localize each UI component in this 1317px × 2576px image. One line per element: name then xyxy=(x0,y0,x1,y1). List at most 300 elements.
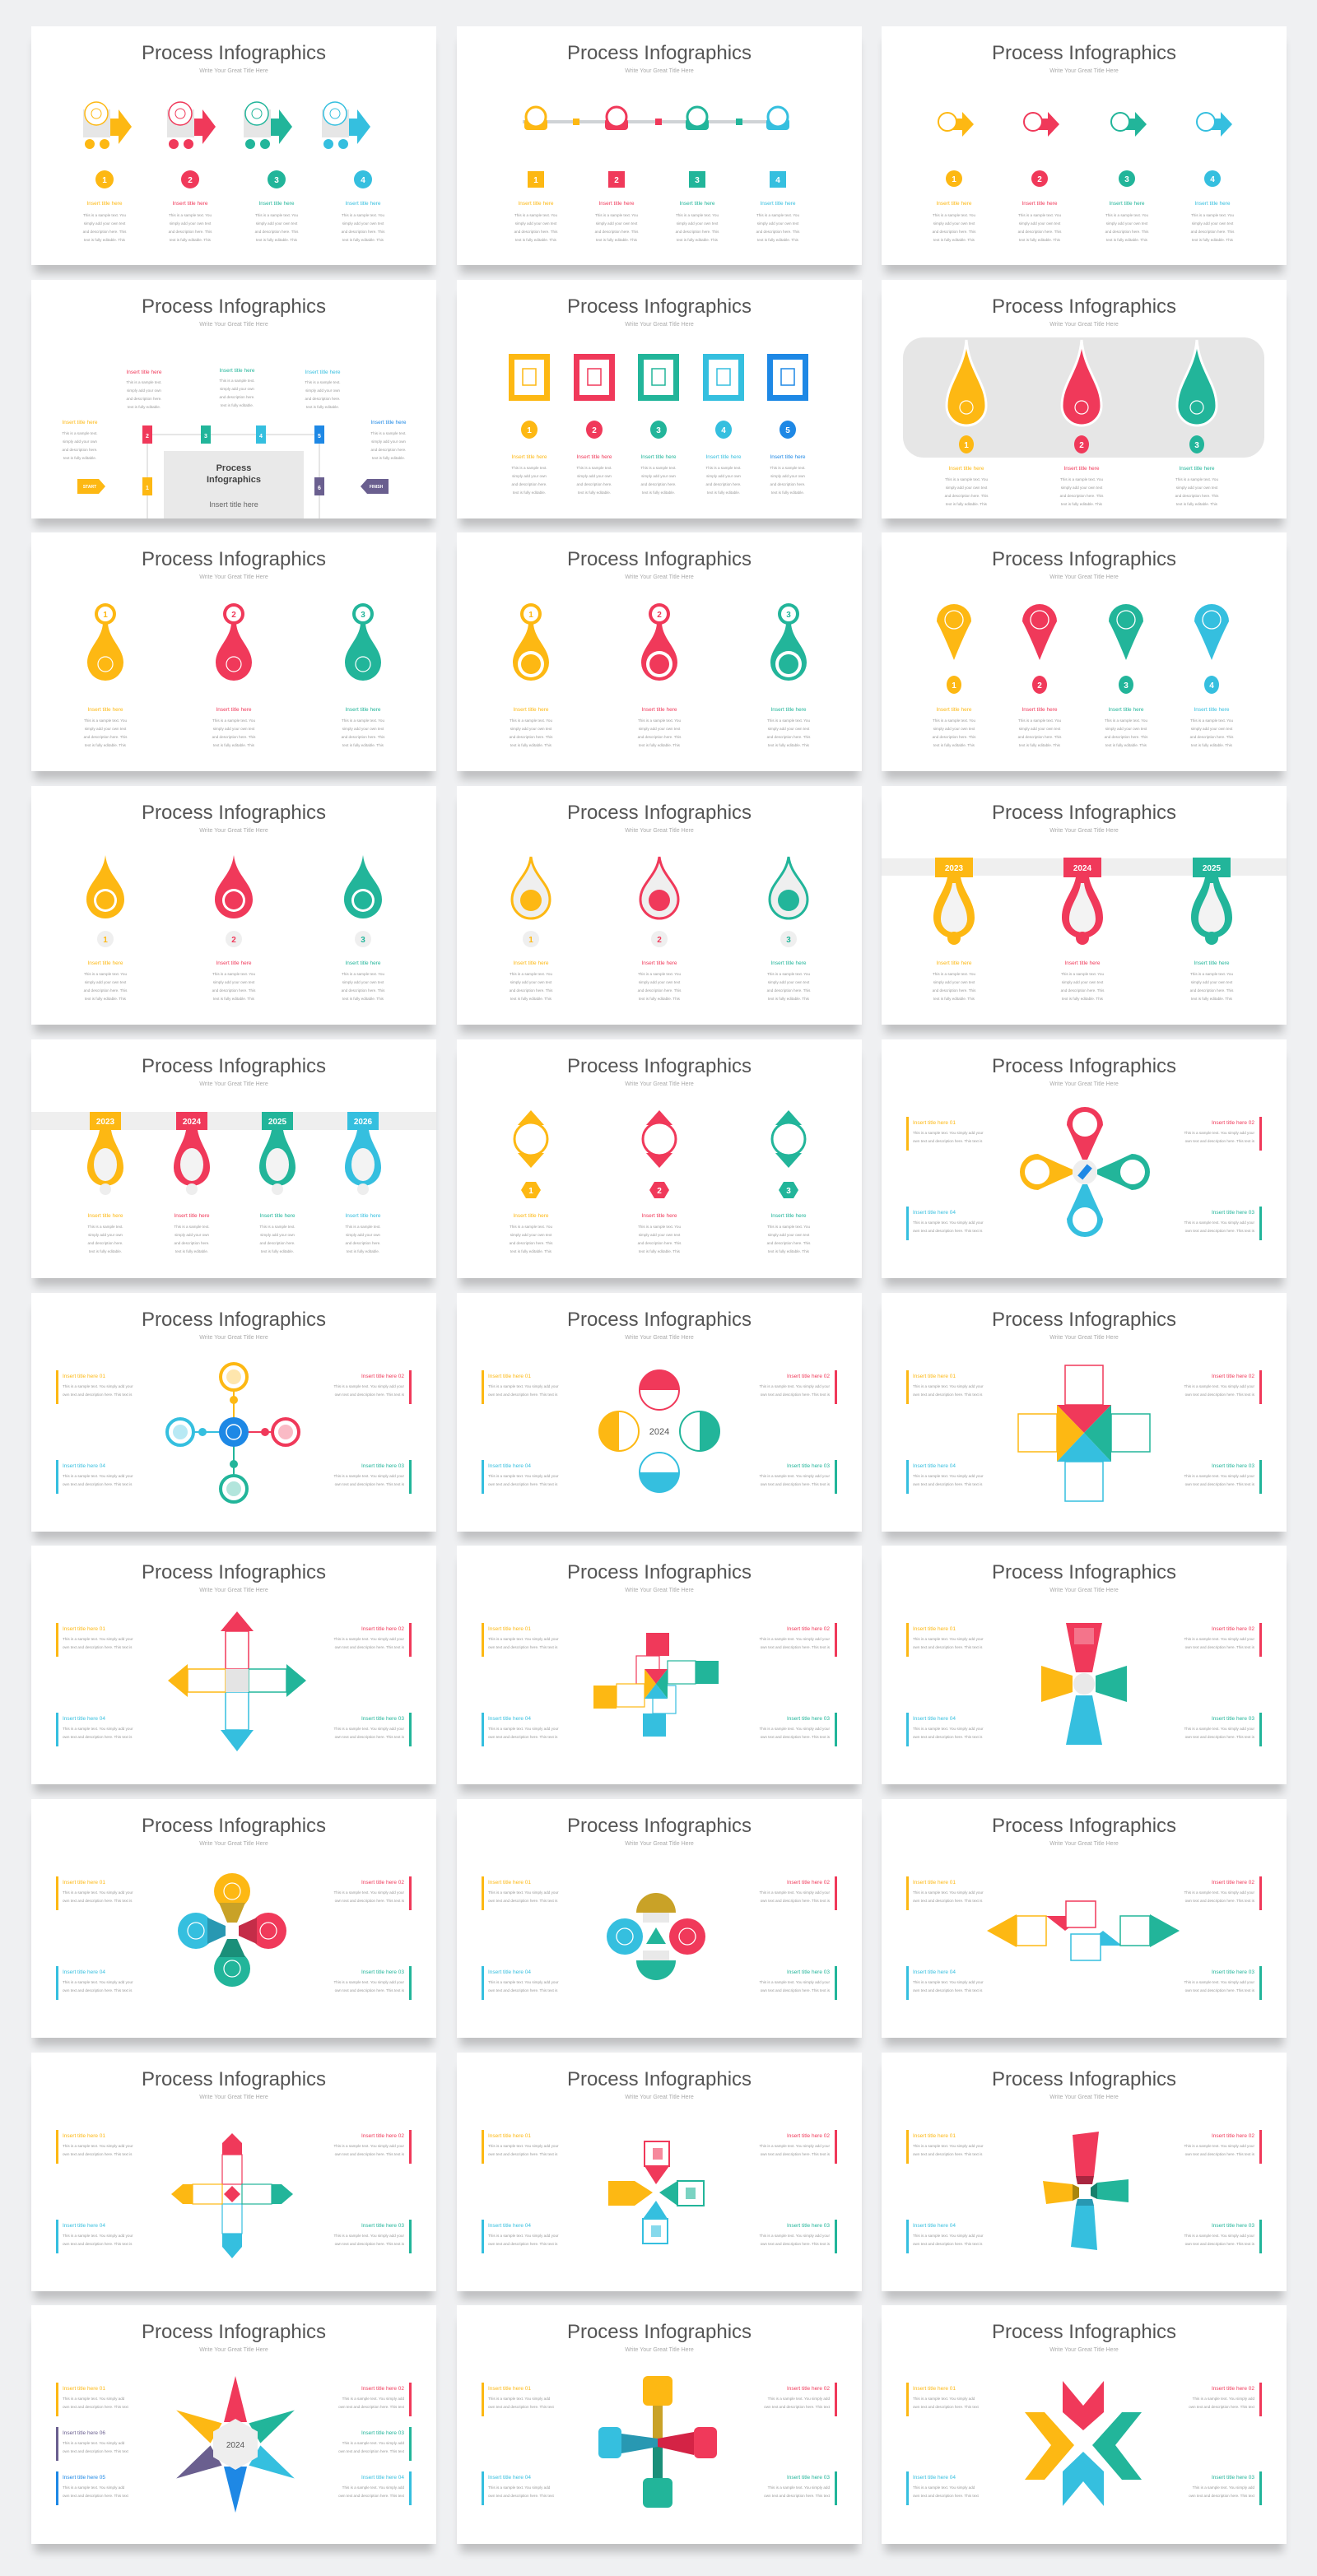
text blocks: own text and description here. This text is xyxy=(63,1482,133,1486)
text blocks: and description here. This xyxy=(945,494,989,498)
text blocks: own text and description here. This text is xyxy=(488,2152,558,2156)
text blocks: own text and description here. This text is xyxy=(1185,1899,1255,1903)
number squares: 3 xyxy=(695,176,700,185)
text blocks: Insert title here 04 xyxy=(488,2223,531,2229)
text blocks: Insert title here 03 xyxy=(1212,1969,1254,1975)
text blocks: own text and description here. This text xyxy=(338,2405,405,2409)
subtitle: Write Your Great Title Here xyxy=(625,1335,694,1341)
text blocks: own text and description here. This text is xyxy=(913,1139,983,1143)
text blocks: Insert title here 02 xyxy=(1212,1374,1254,1379)
text blocks xyxy=(906,2383,1262,2505)
text blocks: text is fully editable. This xyxy=(768,1249,810,1253)
text blocks: This is a sample text. You xyxy=(767,972,810,976)
text blocks: own text and description here. This text is xyxy=(488,2242,558,2246)
trapezoid cross xyxy=(1041,1623,1127,1745)
text blocks: simply add your own xyxy=(260,1233,295,1237)
text blocks: and description here. This xyxy=(638,735,682,739)
text blocks: This is a sample text. You simply add your xyxy=(759,2234,830,2238)
text blocks: This is a sample text. You simply add your xyxy=(913,1384,984,1388)
text blocks: simply add your own text xyxy=(1062,980,1104,984)
text blocks: and description here. xyxy=(371,448,406,452)
numbers xyxy=(521,421,796,439)
text blocks: text is fully editable. xyxy=(175,1249,208,1253)
text blocks: text is fully editable. This xyxy=(170,238,212,242)
center box: Insert title here xyxy=(209,500,258,509)
numbers: 3 xyxy=(274,176,279,185)
text blocks: text is fully editable. xyxy=(642,491,675,495)
text blocks: text is fully editable. This xyxy=(213,743,255,747)
text blocks: This is a sample text. You simply add xyxy=(768,2397,830,2401)
text blocks: own text and description here. This text is xyxy=(761,1735,831,1739)
text blocks: and description here. This xyxy=(1061,988,1105,993)
text blocks: and description here. xyxy=(577,482,612,486)
text blocks: Insert title here 01 xyxy=(913,1374,956,1379)
year drops: 2025 xyxy=(268,1118,287,1127)
text blocks: text is fully editable. This xyxy=(1062,997,1104,1001)
text blocks: and description here. xyxy=(63,448,97,452)
title: Process Infographics xyxy=(142,42,326,64)
text blocks: own text and description here. This text is xyxy=(488,1899,558,1903)
text blocks: text is fully editable. xyxy=(707,491,740,495)
text blocks: own text and description here. This text is xyxy=(1185,2152,1255,2156)
text blocks: own text and description here. This text is xyxy=(335,1735,405,1739)
text blocks: Insert title here 01 xyxy=(488,1626,531,1632)
text blocks: Insert title here 05 xyxy=(63,2475,105,2481)
subtitle: Write Your Great Title Here xyxy=(625,574,694,580)
slide 24: horizontal arrow row xyxy=(882,1799,1287,2038)
text blocks: simply add your own text xyxy=(213,727,255,731)
text blocks: This is a sample text. You simply add your xyxy=(913,2144,984,2148)
year drops: 2025 xyxy=(1203,864,1222,873)
text blocks: text is fully editable. This xyxy=(342,997,384,1001)
text blocks: Insert title here xyxy=(87,960,123,966)
slide 28: six-point star 2024 xyxy=(31,2305,436,2544)
text blocks: Insert title here 02 xyxy=(787,1626,830,1632)
numbers: 1 xyxy=(103,936,108,945)
text blocks: Insert title here 02 xyxy=(361,2386,404,2392)
text blocks: Insert title here 02 xyxy=(361,1880,404,1886)
text blocks: simply add your own text xyxy=(768,980,810,984)
slide 29: bone cross xyxy=(457,2305,862,2544)
text blocks: This is a sample text. You xyxy=(84,718,127,723)
text blocks: simply add your own xyxy=(706,474,741,478)
subtitle: Write Your Great Title Here xyxy=(625,68,694,74)
gray panel xyxy=(903,337,1264,458)
title: Process Infographics xyxy=(992,295,1176,318)
text blocks: This is a sample text. You xyxy=(342,718,384,723)
text blocks: Insert title here xyxy=(1065,960,1101,966)
text blocks: This is a sample text. You simply add your xyxy=(488,1890,559,1895)
text blocks: Insert title here 02 xyxy=(1212,1880,1254,1886)
title: Process Infographics xyxy=(567,1561,752,1583)
text blocks: Insert title here 01 xyxy=(913,1120,956,1126)
text blocks: Insert title here xyxy=(642,1213,677,1219)
hexagon numbers: 1 xyxy=(528,1187,533,1196)
text blocks: This is a sample text. You xyxy=(342,213,384,217)
text blocks: own text and description here. This text is xyxy=(488,1988,558,1992)
text blocks: simply add your own text xyxy=(768,727,810,731)
text blocks: simply add your own text xyxy=(1106,221,1148,226)
slide 11: outlined drops xyxy=(457,786,862,1025)
title: Process Infographics xyxy=(567,2068,752,2090)
text blocks: This is a sample text. You simply add xyxy=(1193,2485,1254,2490)
text blocks: Insert title here 01 xyxy=(913,1880,956,1886)
subtitle: Write Your Great Title Here xyxy=(199,828,268,834)
text blocks: and description here. This xyxy=(514,230,558,234)
text blocks xyxy=(56,1370,412,1494)
text blocks: This is a sample text. You xyxy=(212,972,255,976)
slide 18: X with boxes xyxy=(882,1293,1287,1532)
text blocks: and description here. This xyxy=(1018,230,1062,234)
slide 9: map pins xyxy=(882,532,1287,771)
text blocks: This is a sample text. You xyxy=(1018,718,1061,723)
text blocks: This is a sample text. You xyxy=(510,1225,552,1229)
text blocks: Insert title here 04 xyxy=(913,2475,956,2481)
text blocks: simply add your own text xyxy=(933,727,975,731)
text blocks: and description here. This xyxy=(255,230,299,234)
text blocks: own text and description here. This text xyxy=(338,2494,405,2498)
text blocks: own text and description here. This text is xyxy=(1185,1139,1255,1143)
numbers: 2 xyxy=(1079,441,1084,450)
title: Process Infographics xyxy=(567,1055,752,1077)
text blocks: This is a sample text. You xyxy=(212,718,255,723)
subtitle: Write Your Great Title Here xyxy=(1049,574,1119,580)
text blocks: This is a sample text. You simply add xyxy=(768,2485,830,2490)
text blocks: This is a sample text. You simply add your xyxy=(63,1727,133,1731)
text blocks: Insert title here xyxy=(175,1213,210,1219)
center box xyxy=(164,451,304,518)
text blocks: own text and description here. This text is xyxy=(63,2152,133,2156)
drops xyxy=(86,855,382,918)
numbers: 4 xyxy=(1210,175,1215,184)
text blocks: This is a sample text. You xyxy=(1061,972,1104,976)
text blocks: simply add your own text xyxy=(1191,727,1233,731)
text blocks: simply add your own text xyxy=(342,727,384,731)
text blocks: Insert title here 01 xyxy=(63,2386,105,2392)
title: Process Infographics xyxy=(992,1309,1176,1331)
slide 4: start to finish steps xyxy=(31,280,436,518)
text blocks: own text and description here. This text xyxy=(338,2449,405,2453)
subtitle: Write Your Great Title Here xyxy=(625,828,694,834)
text blocks: This is a sample text. You simply add your xyxy=(63,2234,133,2238)
text blocks: Insert title here 02 xyxy=(361,1374,404,1379)
text blocks xyxy=(84,707,385,747)
text blocks: Insert title here xyxy=(770,1213,807,1219)
text blocks: Insert title here 01 xyxy=(63,1374,105,1379)
text blocks: simply add your own text xyxy=(768,1233,810,1237)
drops xyxy=(513,603,807,681)
text blocks: text is fully editable. This xyxy=(596,238,638,242)
title: Process Infographics xyxy=(992,42,1176,64)
numbers: 1 xyxy=(102,176,107,185)
text blocks: text is fully editable. This xyxy=(1191,743,1233,747)
title: Process Infographics xyxy=(142,548,326,570)
text blocks: simply add your own xyxy=(175,1233,209,1237)
text blocks: This is a sample text. You simply add your xyxy=(333,1727,404,1731)
text blocks: and description here. xyxy=(175,1241,209,1245)
text blocks: and description here. This xyxy=(83,230,127,234)
text blocks: Insert title here xyxy=(642,707,677,713)
text blocks: This is a sample text. You simply add your xyxy=(63,1384,133,1388)
text blocks: text is fully editable. This xyxy=(933,997,975,1001)
text blocks: Insert title here xyxy=(173,201,208,207)
text blocks: own text and description here. This text xyxy=(1189,2494,1255,2498)
text blocks: text is fully editable. This xyxy=(1191,997,1233,1001)
numbers: 2 xyxy=(231,936,236,945)
slide 12: year drops 2023-2025 xyxy=(882,786,1287,1025)
text blocks: This is a sample text. xyxy=(62,431,98,435)
text blocks: text is fully editable. This xyxy=(677,238,719,242)
number squares xyxy=(528,171,786,188)
text blocks: own text and description here. This text is xyxy=(63,1988,133,1992)
text blocks: own text and description here. This text is xyxy=(913,1482,983,1486)
numbers: 1 xyxy=(528,936,533,945)
text blocks: This is a sample text. You simply add xyxy=(63,2485,125,2490)
text blocks: simply add your own text xyxy=(639,980,681,984)
text blocks: This is a sample text. You simply add your xyxy=(1184,2144,1254,2148)
text blocks xyxy=(56,2383,412,2505)
text blocks xyxy=(56,1876,412,2000)
text blocks: and description here. This xyxy=(1190,988,1234,993)
drops: 2 xyxy=(657,611,662,620)
text blocks: own text and description here. This text is xyxy=(63,1735,133,1739)
text blocks: This is a sample text. You simply add your xyxy=(63,1637,133,1641)
text blocks: Insert title here 03 xyxy=(787,1463,830,1469)
title: Process Infographics xyxy=(142,802,326,824)
text blocks: This is a sample text. You simply add your xyxy=(759,1474,830,1478)
text blocks: This is a sample text. You simply add xyxy=(63,2441,125,2445)
text blocks: Insert title here 03 xyxy=(787,2223,830,2229)
text blocks: own text and description here. This text is xyxy=(63,2242,133,2246)
text blocks: text is fully editable. xyxy=(63,456,96,460)
text blocks: text is fully editable. This xyxy=(1176,502,1218,506)
text blocks: text is fully editable. This xyxy=(1019,743,1061,747)
text blocks: simply add your own text xyxy=(1061,486,1103,490)
text blocks: Insert title here 04 xyxy=(63,1969,105,1975)
text blocks: Insert title here 01 xyxy=(63,2133,105,2139)
text blocks: Insert title here xyxy=(87,1213,123,1219)
text blocks: This is a sample text. You simply add xyxy=(913,2397,975,2401)
title: Process Infographics xyxy=(142,295,326,318)
subtitle: Write Your Great Title Here xyxy=(625,2347,694,2353)
text blocks: This is a sample text. You simply add your xyxy=(333,1637,404,1641)
text blocks: This is a sample text. You simply add xyxy=(342,2485,404,2490)
text blocks: This is a sample text. You simply add your xyxy=(63,1890,133,1895)
slide 16: connected circles xyxy=(31,1293,436,1532)
subtitle: Write Your Great Title Here xyxy=(199,1081,268,1087)
title: Process Infographics xyxy=(567,1309,752,1331)
text blocks: and description here. This xyxy=(1175,494,1219,498)
text blocks: Insert title here xyxy=(937,960,972,966)
text blocks: Insert title here 03 xyxy=(787,1716,830,1722)
text blocks: simply add your own text xyxy=(639,727,681,731)
numbers: 4 xyxy=(361,176,365,185)
text blocks: This is a sample text. You simply add your xyxy=(333,1384,404,1388)
text blocks: simply add your own text xyxy=(510,980,552,984)
text blocks: Insert title here 01 xyxy=(488,1374,531,1379)
box pinwheel xyxy=(608,2141,704,2244)
arrow cross xyxy=(168,1611,306,1751)
text blocks: text is fully editable. This xyxy=(342,743,384,747)
slide 5: five framed squares xyxy=(457,280,862,518)
text blocks: own text and description here. This text xyxy=(63,2494,129,2498)
text blocks: Insert title here 04 xyxy=(913,1210,956,1216)
text blocks: text is fully editable. This xyxy=(946,502,988,506)
text blocks: This is a sample text. You xyxy=(342,972,384,976)
text blocks: own text and description here. This text is xyxy=(913,1735,983,1739)
subtitle: Write Your Great Title Here xyxy=(625,1841,694,1847)
title: Process Infographics xyxy=(992,2321,1176,2343)
text blocks: simply add your own text xyxy=(85,980,127,984)
start arrow: START xyxy=(83,485,96,490)
numbers: 2 xyxy=(592,426,597,435)
framed squares xyxy=(509,354,808,401)
start arrow xyxy=(77,479,105,494)
text blocks: Insert title here 04 xyxy=(63,1463,105,1469)
text blocks: This is a sample text. You xyxy=(945,477,988,481)
numbers xyxy=(959,435,1204,453)
text blocks: and description here. This xyxy=(169,230,212,234)
numbers: 2 xyxy=(188,176,193,185)
text blocks: text is fully editable. This xyxy=(639,1249,681,1253)
text blocks: and description here. This xyxy=(342,230,385,234)
text blocks: and description here. This xyxy=(676,230,719,234)
text blocks: This is a sample text. You xyxy=(767,1225,810,1229)
text blocks: Insert title here 03 xyxy=(361,1969,404,1975)
text blocks: text is fully editable. This xyxy=(342,238,384,242)
text blocks: This is a sample text. You xyxy=(676,213,719,217)
text blocks: Insert title here xyxy=(346,201,381,207)
text blocks: Insert title here 02 xyxy=(787,1880,830,1886)
text blocks: Insert title here 02 xyxy=(1212,1626,1254,1632)
text blocks: Insert title here 04 xyxy=(488,1463,531,1469)
text blocks: and description here. xyxy=(512,482,547,486)
title: Process Infographics xyxy=(142,2068,326,2090)
text blocks xyxy=(906,1117,1262,1240)
text blocks: and description here. This xyxy=(595,230,639,234)
text blocks: Insert title here xyxy=(346,707,381,713)
text blocks: Insert title here xyxy=(1194,707,1230,713)
text blocks: text is fully editable. This xyxy=(510,997,552,1001)
text blocks: own text and description here. This text is xyxy=(1185,1735,1255,1739)
text blocks xyxy=(482,2130,837,2253)
text blocks: This is a sample text. You simply add your xyxy=(1184,1727,1254,1731)
text blocks: text is fully editable. This xyxy=(213,997,255,1001)
text blocks: text is fully editable. This xyxy=(85,743,127,747)
text blocks: own text and description here. This text xyxy=(488,2405,555,2409)
numbers: 3 xyxy=(1124,681,1129,690)
text blocks xyxy=(482,1623,837,1746)
text blocks: This is a sample text. xyxy=(126,380,162,384)
text blocks: Insert title here xyxy=(599,201,635,207)
numbers: 1 xyxy=(527,426,532,435)
text blocks: This is a sample text. You simply add your xyxy=(1184,1384,1254,1388)
text blocks: own text and description here. This text is xyxy=(1185,1393,1255,1397)
text blocks: This is a sample text. You simply add your xyxy=(488,1980,559,1984)
text blocks: and description here. xyxy=(127,397,161,401)
text blocks: simply add your own xyxy=(305,388,340,393)
text blocks: This is a sample text. You xyxy=(1175,477,1218,481)
text blocks: Insert title here 01 xyxy=(63,1880,105,1886)
subtitle: Write Your Great Title Here xyxy=(625,322,694,328)
text blocks: and description here. xyxy=(770,482,805,486)
text blocks: This is a sample text. You simply add your xyxy=(913,1890,984,1895)
connector lines xyxy=(147,435,319,518)
text blocks: This is a sample text. You simply add your xyxy=(333,2144,404,2148)
drops: 2 xyxy=(231,611,236,620)
text blocks: Insert title here xyxy=(770,960,807,966)
text blocks: Insert title here xyxy=(1108,707,1144,713)
title: Process Infographics xyxy=(567,802,752,824)
text blocks: own text and description here. This text is xyxy=(1185,1229,1255,1233)
bone cross xyxy=(598,2376,717,2508)
text blocks: Insert title here xyxy=(1110,201,1145,207)
text blocks: This is a sample text. You xyxy=(169,213,212,217)
text blocks: Insert title here 04 xyxy=(913,2223,956,2229)
text blocks: Insert title here 03 xyxy=(1212,2475,1254,2481)
diamond arrows xyxy=(171,2133,293,2258)
step boxes: 5 xyxy=(318,434,321,439)
text blocks xyxy=(906,1623,1262,1746)
text blocks: Insert title here xyxy=(63,420,98,425)
text blocks: text is fully editable. This xyxy=(639,997,681,1001)
title: Process Infographics xyxy=(142,2321,326,2343)
title: Process Infographics xyxy=(992,802,1176,824)
text blocks: and description here. This xyxy=(638,1241,682,1245)
subtitle: Write Your Great Title Here xyxy=(199,574,268,580)
text blocks: Insert title here xyxy=(346,1213,381,1219)
text blocks xyxy=(514,201,800,242)
slide 13: year drops 2023-2026 xyxy=(31,1039,436,1278)
pinwheel xyxy=(593,1633,719,1737)
slide 7: numbered drops xyxy=(31,532,436,771)
text blocks: and description here. This xyxy=(510,1241,553,1245)
text blocks: Insert title here xyxy=(680,201,715,207)
numbers: 3 xyxy=(656,426,661,435)
text blocks: own text and description here. This text xyxy=(764,2405,831,2409)
text blocks: own text and description here. This text is xyxy=(913,2242,983,2246)
text blocks: Insert title here 01 xyxy=(913,1626,956,1632)
text blocks: Insert title here xyxy=(219,368,255,374)
text blocks: simply add your own text xyxy=(639,1233,681,1237)
text blocks: simply add your own xyxy=(88,1233,123,1237)
text blocks: text is fully editable. xyxy=(89,1249,122,1253)
text blocks xyxy=(945,466,1219,506)
text blocks: This is a sample text. You xyxy=(255,213,298,217)
text blocks: Insert title here xyxy=(305,370,341,375)
drops xyxy=(947,340,1217,425)
text blocks: text is fully editable. This xyxy=(1061,502,1103,506)
text blocks: own text and description here. This text is xyxy=(761,2242,831,2246)
slide 19: arrow cross xyxy=(31,1546,436,1784)
text blocks: simply add your own text xyxy=(510,727,552,731)
text blocks: and description here. This xyxy=(767,735,811,739)
text blocks: This is a sample text. You xyxy=(1105,718,1147,723)
year drops: 2026 xyxy=(354,1118,373,1127)
text blocks xyxy=(482,1370,837,1494)
step 4 truck xyxy=(322,102,370,149)
text blocks: text is fully editable. This xyxy=(1106,238,1148,242)
text blocks: This is a sample text. You xyxy=(933,718,975,723)
text blocks: text is fully editable. xyxy=(347,1249,379,1253)
ribbon cross xyxy=(1043,2132,1129,2250)
text blocks: This is a sample text. You xyxy=(510,718,552,723)
text blocks: Insert title here xyxy=(370,420,407,425)
text blocks: This is a sample text. You simply add your xyxy=(1184,1890,1254,1895)
text blocks: This is a sample text. You xyxy=(933,972,975,976)
finish arrow xyxy=(361,479,389,494)
text blocks: simply add your own text xyxy=(933,980,975,984)
